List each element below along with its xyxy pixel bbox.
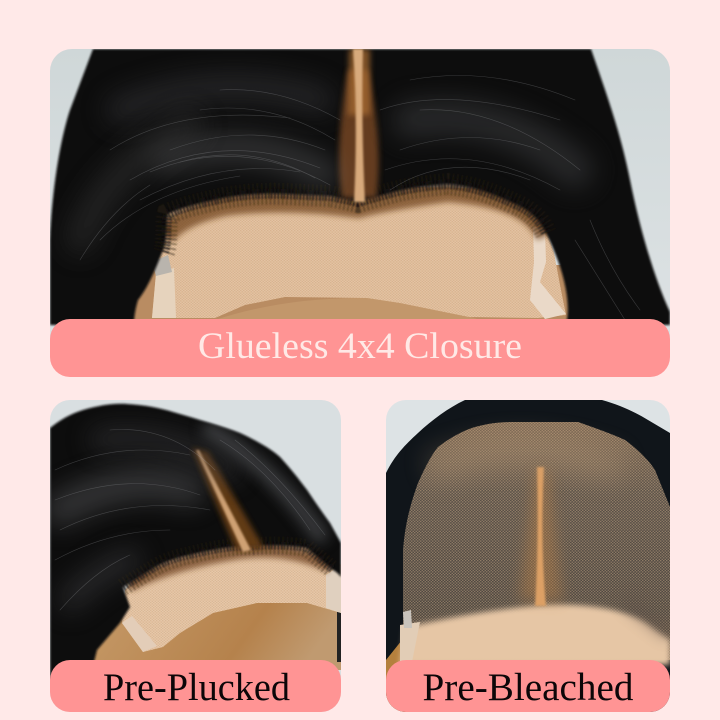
label: Pre-Bleached: Pre-Bleached (422, 666, 634, 709)
hairline fringe (123, 545, 333, 587)
photo: closure lace top view (50, 49, 670, 338)
panel: Pre-Bleached (386, 400, 670, 720)
panel: Pre-Plucked (50, 400, 341, 712)
label: Pre-Plucked: Pre-Plucked (103, 666, 290, 709)
hair sheen (55, 430, 325, 610)
hair sheen (80, 76, 640, 320)
panel: Glueless 4x4 Closure (50, 49, 670, 377)
label: Pre-Bleached (386, 660, 670, 712)
photo: pre-plucked hairline (50, 400, 341, 712)
label: Glueless 4x4 Closure: Glueless 4x4 Closure (198, 326, 522, 367)
photo: pre-bleached lace inside view (386, 400, 670, 720)
label: Pre-Plucked (50, 660, 341, 712)
label: Glueless 4x4 Closure (50, 319, 670, 377)
hairline fringe (164, 184, 546, 252)
